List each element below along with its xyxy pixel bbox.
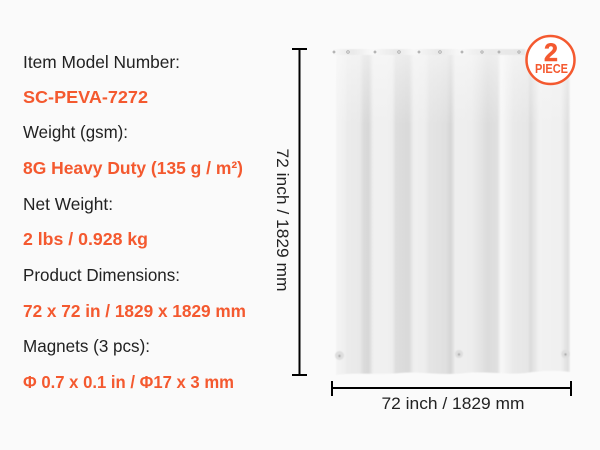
shower curtain xyxy=(332,49,574,375)
specifications list xyxy=(23,52,246,392)
curtain header band xyxy=(333,49,525,55)
top grommets xyxy=(333,51,520,53)
value: magnets: Φ 0.7 x 0.1 in / Φ17 x 3 mm xyxy=(23,372,234,392)
value: weight: 8G Heavy Duty (135 g / m²) xyxy=(23,158,243,178)
height dimension label: 72 inch / 1829 mm xyxy=(273,148,292,292)
curtain body xyxy=(336,50,570,375)
label: item model number: Item Model Number: xyxy=(23,52,180,72)
width dimension label: 72 inch / 1829 mm xyxy=(382,394,524,413)
badge: 2 piece xyxy=(526,36,574,84)
label: net weight: Net Weight: xyxy=(23,194,113,214)
label: product dimensions: Product Dimensions: xyxy=(23,265,180,285)
width dimension arrow xyxy=(332,381,571,413)
value: product dimensions: 72 x 72 in / 1829 x 1829 mm xyxy=(23,301,246,321)
badge number: 2 xyxy=(544,39,558,67)
height dimension arrow xyxy=(273,49,307,375)
value: item model number: SC-PEVA-7272 xyxy=(23,87,148,107)
badge caption: PIECE xyxy=(535,62,568,76)
label: magnets: Magnets (3 pcs): xyxy=(23,336,150,356)
label: weight: Weight (gsm): xyxy=(23,122,128,142)
magnets xyxy=(335,350,570,360)
value: net weight: 2 lbs / 0.928 kg xyxy=(23,229,148,249)
top fade xyxy=(332,50,574,125)
